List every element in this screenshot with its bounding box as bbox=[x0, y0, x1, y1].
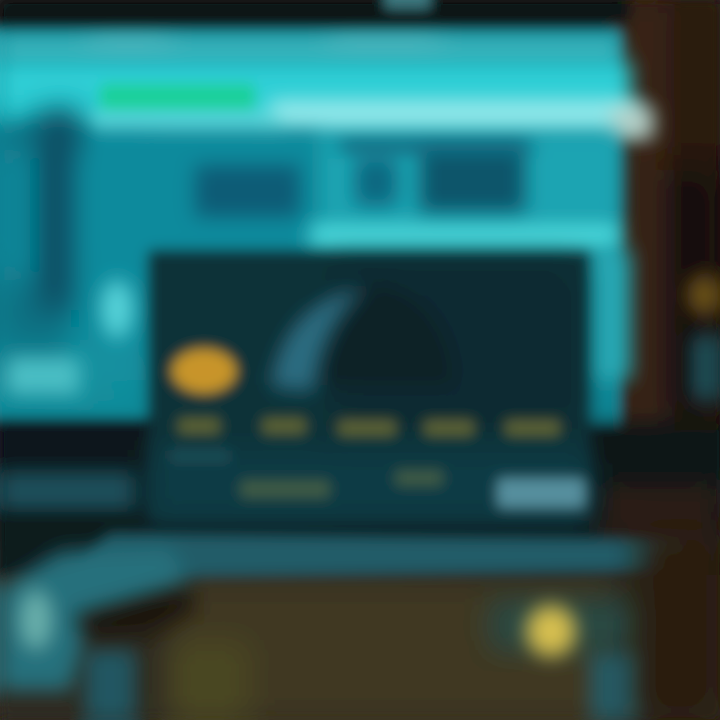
green highlight button bbox=[100, 84, 255, 109]
screen: teal display bbox=[0, 0, 652, 425]
right side amber glow bbox=[688, 275, 720, 315]
laptop base bbox=[0, 530, 720, 720]
lower left dark desk band bbox=[0, 418, 720, 547]
credit card bbox=[148, 250, 590, 522]
card logo block bbox=[497, 478, 585, 508]
right side teal reflection bbox=[692, 335, 720, 400]
yellow glowing light bbox=[527, 606, 575, 656]
card name row bbox=[170, 450, 443, 498]
card number row bbox=[178, 418, 560, 436]
card arc emblem bbox=[268, 285, 455, 385]
card chip bbox=[171, 348, 237, 394]
